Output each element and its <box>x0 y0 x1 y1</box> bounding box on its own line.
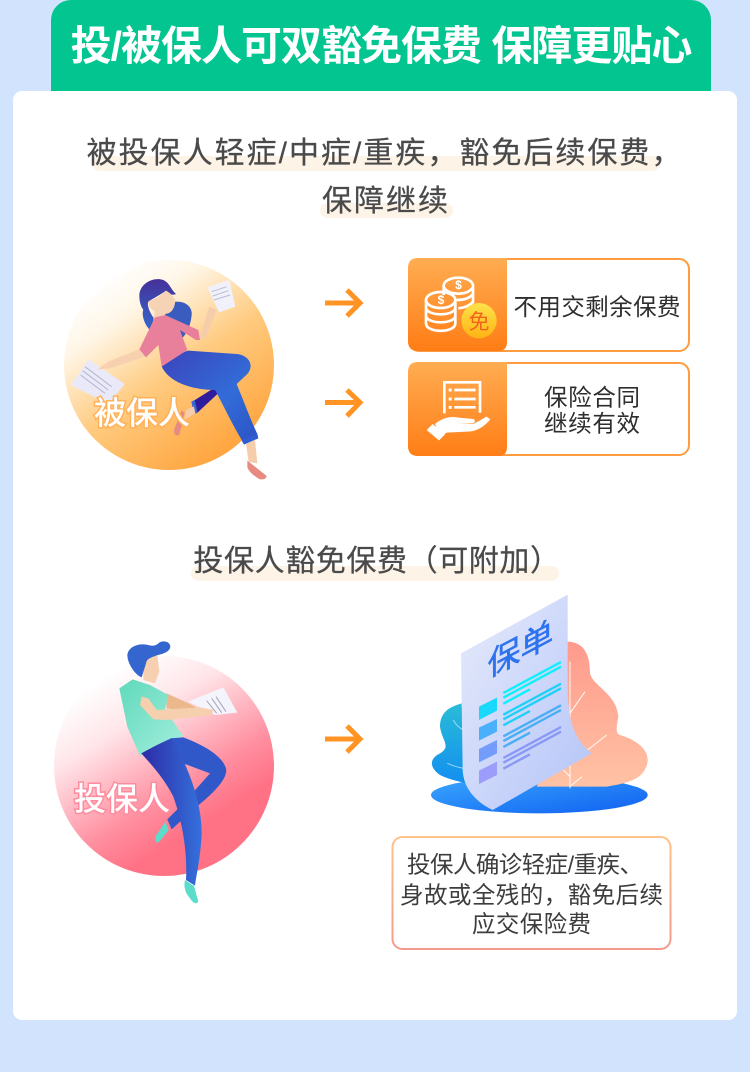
arrow 2 <box>325 390 360 416</box>
label: insured: 被保人 <box>94 395 190 431</box>
arrow 3 <box>325 726 360 752</box>
doc lines <box>503 662 561 769</box>
card: no remaining premium <box>408 258 689 351</box>
heading: insured waiver line 1: 被投保人轻症/中症/重疾，豁免后续保费， <box>87 137 683 170</box>
doc title: 保单 <box>488 614 553 685</box>
title: 投/被保人可双豁免保费 保障更贴心 <box>71 23 691 69</box>
card: contract stays valid <box>408 362 689 456</box>
text: 保险合同 <box>544 384 640 410</box>
heading highlight 1 <box>92 156 660 171</box>
header banner <box>51 0 711 92</box>
card: no remaining premium: $ <box>438 293 445 307</box>
callout text: 身故或全残的，豁免后续 <box>400 882 663 908</box>
arrow 1 <box>325 290 360 316</box>
heading highlight 3 <box>191 566 559 581</box>
illustration: policy document <box>431 595 648 813</box>
card: no remaining premium: $ <box>455 278 462 292</box>
heading: policyholder waiver: 投保人豁免保费（可附加） <box>193 545 561 578</box>
card: no remaining premium: 免 <box>468 311 490 334</box>
illustration: policyholder man <box>54 641 274 903</box>
card: contract stays valid: 继续有效 <box>544 410 640 436</box>
heading highlight 2 <box>320 203 453 218</box>
text: 不用交剩余保费 <box>514 294 680 320</box>
callout text: 应交保险费 <box>472 911 591 937</box>
icon: coins <box>426 278 497 338</box>
heading: insured waiver line 2: 保障继续 <box>322 185 450 218</box>
callout box <box>392 837 670 949</box>
callout text: 投保人确诊轻症/重疾、 <box>407 852 643 878</box>
callout text <box>400 852 663 937</box>
icon: hand holding document <box>427 382 490 440</box>
label: policyholder: 投保人 <box>74 781 170 817</box>
illustration: insured woman <box>64 260 274 479</box>
